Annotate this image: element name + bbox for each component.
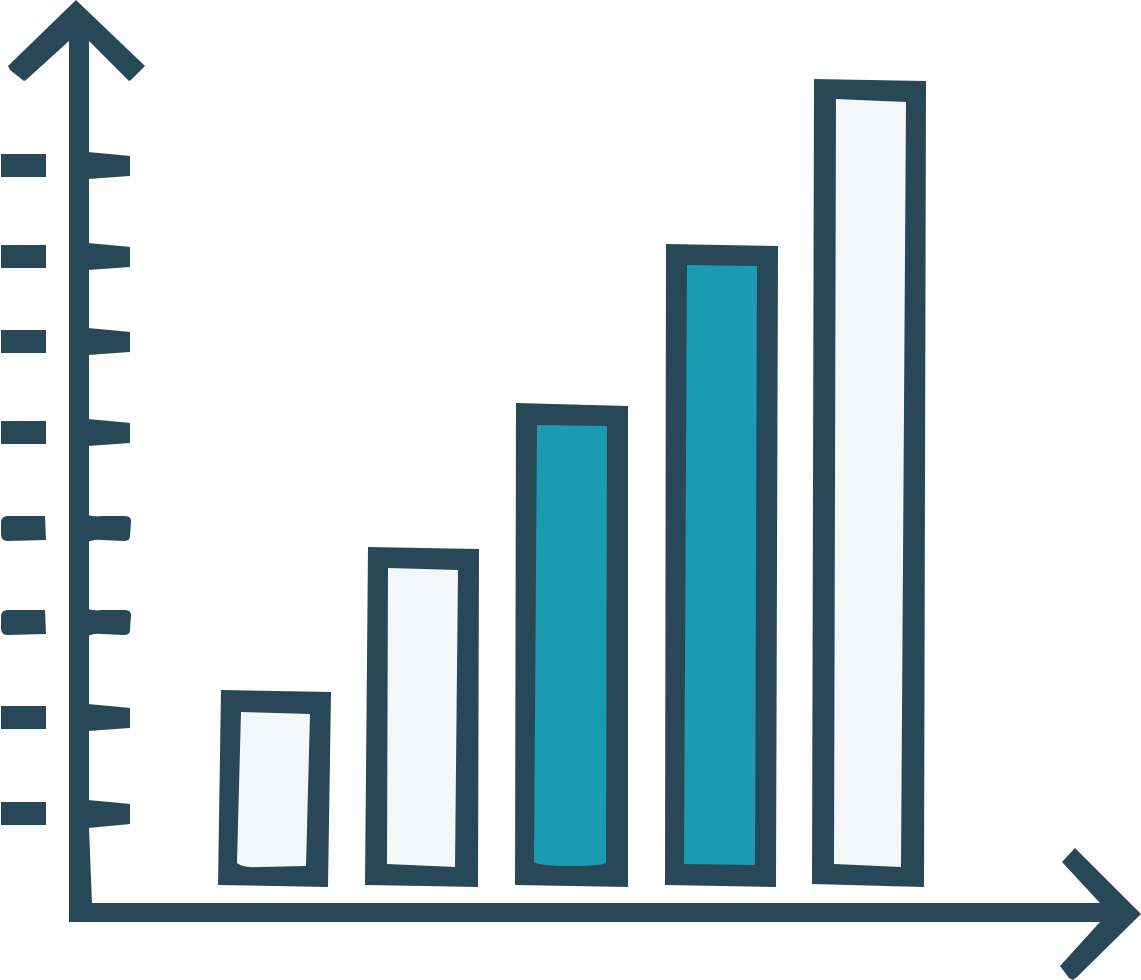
bar 3 xyxy=(515,403,628,887)
bar 2 xyxy=(365,547,479,887)
y axis ticks left xyxy=(1,154,46,825)
bar 5 xyxy=(812,79,926,887)
y axis with arrow head xyxy=(8,0,145,922)
bar 4 xyxy=(665,244,778,887)
y axis ticks right xyxy=(88,152,131,828)
bar 1 xyxy=(218,690,331,887)
x axis with arrow head xyxy=(69,848,1141,980)
